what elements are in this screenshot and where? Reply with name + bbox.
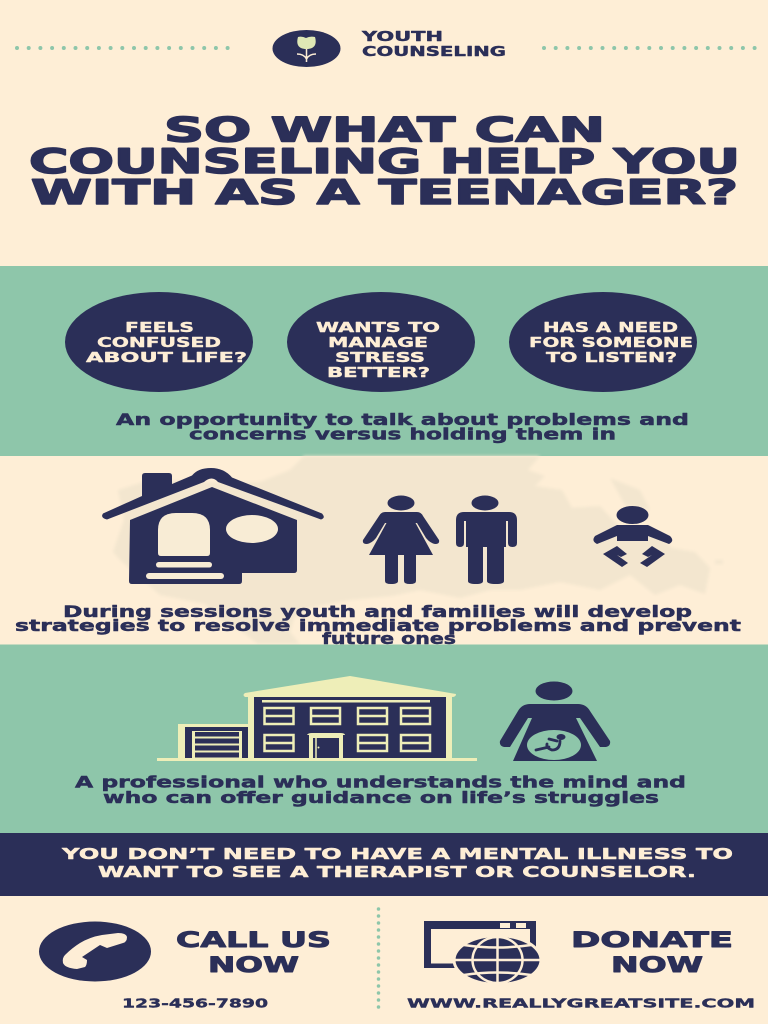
phone number: 123-456-7890 — [122, 996, 268, 1010]
brand name: COUNSELING — [362, 45, 506, 60]
question bubble: stress: BETTER? — [327, 365, 430, 381]
call us text: CALL US — [176, 928, 331, 952]
header: logo and brand — [17, 30, 764, 67]
text block: strategies: strategies to resolve immediate problems and prevent — [15, 616, 742, 635]
banner: no mental illness needed: WANT TO SEE A THERAPIST OR COUNSELOR. — [98, 863, 696, 881]
question bubble: stress — [287, 292, 475, 392]
donate text: NOW — [611, 953, 703, 977]
question bubble: stress: MANAGE — [328, 335, 428, 351]
title — [29, 110, 740, 213]
panel: professional — [0, 644, 768, 834]
text block: strategies — [15, 602, 742, 648]
text block: opportunity — [116, 410, 689, 444]
icon: browser and globe — [424, 921, 542, 986]
text block: strategies: future ones — [322, 629, 456, 648]
text block: opportunity: concerns versus holding them in — [189, 424, 616, 444]
panel: questions — [0, 266, 768, 456]
brand name: YOUTH — [360, 30, 443, 45]
icon: family home — [102, 468, 324, 584]
title: COUNSELING HELP YOU — [29, 142, 740, 182]
question bubble: stress: WANTS TO — [316, 320, 440, 336]
icon: woman — [363, 496, 439, 584]
footer: call to action — [39, 909, 755, 1010]
call us text: NOW — [208, 953, 299, 977]
background world map — [113, 456, 723, 644]
question bubble: listen — [509, 292, 697, 392]
donate text — [571, 928, 733, 977]
question bubble: listen: FOR SOMEONE — [529, 335, 693, 351]
question bubble: confused — [65, 292, 253, 392]
text block: professional: A professional who understands the mind and — [75, 772, 686, 792]
icon: pregnant woman — [500, 682, 610, 761]
donate text: DONATE — [571, 928, 733, 952]
text block: professional: who can offer guidance on life’s struggles — [103, 788, 659, 807]
banner: no mental illness needed — [0, 833, 768, 896]
question bubble: confused: ABOUT LIFE? — [86, 350, 247, 366]
question bubble: stress: STRESS — [335, 350, 425, 366]
icon: phone — [39, 922, 151, 982]
title: SO WHAT CAN — [164, 110, 605, 150]
call us text — [176, 928, 331, 977]
text block: professional — [75, 772, 686, 807]
banner: no mental illness needed: YOU DON’T NEED TO HAVE A MENTAL ILLNESS TO — [60, 845, 733, 863]
icon: large house — [157, 676, 477, 761]
title: WITH AS A TEENAGER? — [31, 173, 738, 213]
brand name — [360, 30, 506, 60]
icon: tulip logo — [272, 30, 340, 67]
question bubble: confused: FEELS — [125, 320, 194, 336]
question bubble: confused: CONFUSED — [97, 335, 221, 351]
panel: families — [15, 456, 742, 648]
text block: strategies: During sessions youth and families will develop — [63, 602, 692, 621]
website: WWW.REALLYGREATSITE.COM — [407, 996, 755, 1010]
icon: man — [456, 496, 517, 584]
question bubble: listen: TO LISTEN? — [546, 350, 677, 366]
icon: baby — [593, 506, 672, 567]
text block: opportunity: An opportunity to talk about problems and — [116, 410, 689, 429]
question bubble: listen: HAS A NEED — [543, 320, 678, 336]
